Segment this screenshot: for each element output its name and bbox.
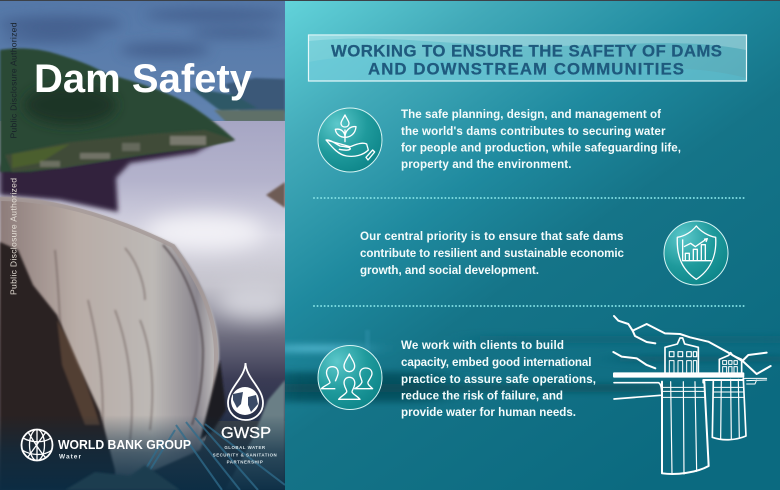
- shoreline rocks: [5, 130, 235, 172]
- text block: client work: practice to assure safe operations,: [401, 373, 596, 386]
- heading banner: [308, 35, 746, 81]
- stairway: [145, 418, 285, 490]
- text block: central priority: [360, 230, 625, 277]
- logo: GWSP: GWSP: [221, 425, 271, 442]
- title: Dam Safety: Dam Safety: [34, 57, 253, 101]
- text block: client work: reduce the risk of failure, and: [401, 390, 563, 402]
- text block: client work: provide water for human needs.: [401, 406, 576, 419]
- vertical stamp: upper: Public Disclosure Authorized: [8, 22, 18, 138]
- dotted divider lower: [314, 305, 746, 307]
- logo: GWSP: [213, 363, 277, 464]
- heading text: WORKING TO ENSURE THE SAFETY OF DAMS: [331, 42, 722, 60]
- vertical stamp: lower: Public Disclosure Authorized: [8, 178, 18, 295]
- logo: World Bank Group: [22, 430, 191, 460]
- logo: GWSP: GLOBAL WATER: [224, 445, 266, 450]
- text block: purpose: for people and production, while safeguarding life,: [401, 142, 681, 154]
- concrete dam wall: [0, 197, 219, 490]
- text block: client work: We work with clients to build: [401, 339, 564, 352]
- panel: teal content background: [270, 1, 780, 490]
- text block: central priority: contribute to resilient and sustainable economic: [360, 247, 625, 260]
- text block: purpose: the world's dams contributes to securing water: [401, 125, 666, 138]
- illustration: dam line drawing: [613, 316, 771, 474]
- dam shadow and rock face: [0, 242, 115, 490]
- panel: dam photograph: [0, 1, 293, 490]
- text block: purpose: The safe planning, design, and management of: [401, 108, 661, 121]
- text block: central priority: growth, and social development.: [360, 264, 539, 277]
- logo: GWSP: PARTNERSHIP: [227, 460, 263, 464]
- dotted divider upper: [314, 197, 746, 199]
- icon: hand holding plant: [318, 108, 382, 172]
- text block: client work: [401, 339, 596, 419]
- text block: central priority: Our central priority is to ensure that safe dams: [360, 230, 624, 243]
- forested hillside: [0, 48, 235, 172]
- dark water near shore: [0, 142, 215, 212]
- text block: purpose: [401, 108, 681, 171]
- rock slope right: [233, 380, 285, 480]
- heading text: [331, 42, 722, 78]
- logo: World Bank Group: Water: [59, 454, 81, 460]
- icon: water drop globe: [228, 363, 263, 420]
- logo: World Bank Group: WORLD BANK GROUP: [58, 438, 191, 452]
- heading text: AND DOWNSTREAM COMMUNITIES: [368, 60, 684, 78]
- text block: purpose: property and the environment.: [401, 158, 572, 171]
- logo: GWSP: SECURITY & SANITATION: [213, 452, 277, 458]
- icon: shield with chart: [664, 221, 728, 285]
- lake reflections: [145, 214, 293, 318]
- icon: globe: [22, 430, 52, 460]
- icon: people and water drop: [318, 346, 382, 410]
- text block: client work: capacity, embed good international: [401, 356, 592, 369]
